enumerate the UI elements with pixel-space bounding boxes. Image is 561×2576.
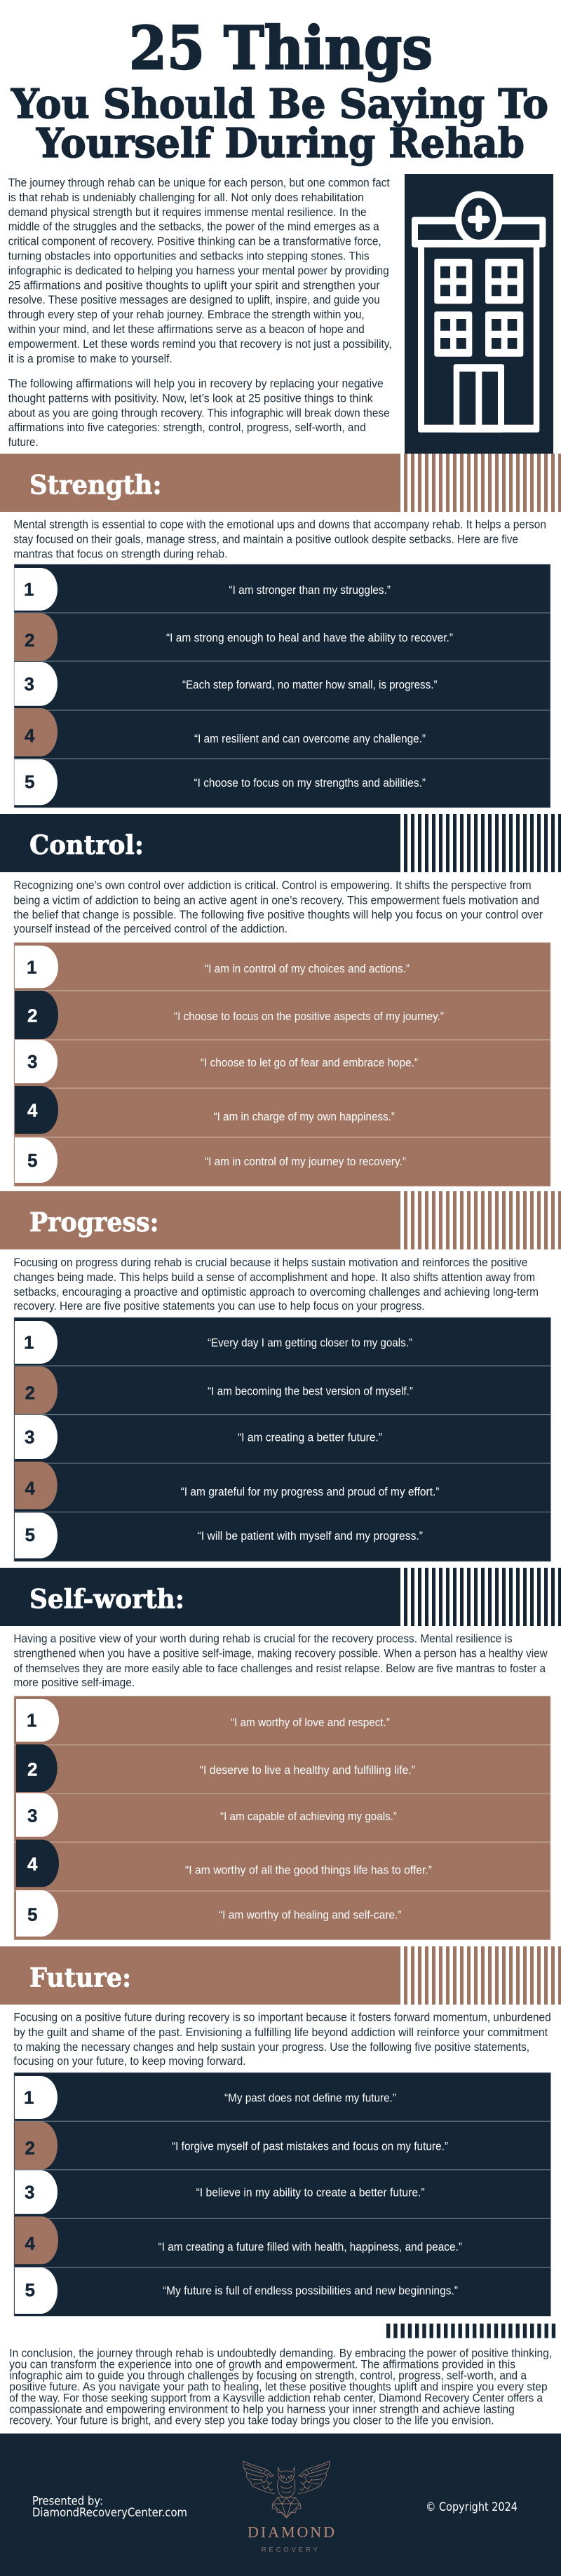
progress affirmation list: “Every day I am getting closer to my goals.”	[208, 1337, 412, 1350]
strength affirmation list: 5	[25, 771, 34, 792]
section header: progress	[0, 1191, 561, 1249]
strength description	[13, 518, 546, 561]
control description	[13, 879, 543, 935]
strength affirmation list: 4	[25, 725, 35, 746]
self-worth affirmation list: “I am capable of achieving my goals.”	[220, 1810, 397, 1823]
intro text block: The journey through rehab can be unique for each person, but one common fact	[8, 176, 390, 189]
conclusion text	[9, 2347, 552, 2427]
intro text block: it is a promise to make to yourself.	[8, 352, 173, 365]
progress affirmation list: 5	[25, 1524, 35, 1545]
self-worth affirmation list	[14, 1696, 550, 1940]
title	[11, 13, 548, 167]
progress affirmation list: 1	[24, 1332, 34, 1353]
intro text block: through every step of your rehab journey. Embrace the strength within you,	[8, 308, 365, 321]
self-worth description: more positive self-image.	[13, 1676, 135, 1689]
control affirmation list: 5	[27, 1150, 37, 1171]
control affirmation list: “I am in control of my journey to recovery.”	[205, 1155, 406, 1168]
self-worth affirmation list: “I am worthy of healing and self-care.”	[219, 1909, 401, 1922]
intro text block: is that rehab is undeniably challenging for all. Not only does rehabilitation	[8, 191, 364, 204]
control description: yourself instead of the perceived control of the addiction.	[13, 922, 288, 935]
future description: focusing on your future, to keep moving forward.	[13, 2054, 246, 2068]
control affirmation list: “I am in charge of my own happiness.”	[214, 1111, 395, 1123]
section header: self-worth: Self-worth:	[29, 1583, 184, 1614]
control affirmation list	[14, 942, 550, 1186]
self-worth affirmation list: “I deserve to live a healthy and fulfilling life.”	[200, 1764, 415, 1777]
conclusion text: recovery. Your future is bright, and every step you take today brings you closer to the life you envision.	[9, 2414, 494, 2427]
progress affirmation list: “I will be patient with myself and my progress.”	[198, 1530, 423, 1543]
intro text block: turning obstacles into opportunities and setbacks into stepping stones. This	[8, 250, 370, 262]
logo: diamond recovery owl: RECOVERY	[262, 2546, 318, 2554]
control affirmation list: “I choose to let go of fear and embrace hope.”	[201, 1057, 418, 1069]
section header: future	[0, 1946, 561, 2005]
title: You Should Be Saying To	[11, 81, 548, 128]
self-worth affirmation list: 3	[27, 1805, 37, 1826]
conclusion text: you can transform the experience into one of growth and empowerment. The affirmations provided in this	[9, 2358, 515, 2371]
self-worth description: Having a positive view of your worth during rehab is crucial for the recovery process. Mental resilience is	[13, 1632, 513, 1646]
logo: diamond recovery owl: DIAMOND	[248, 2523, 334, 2540]
section header: strength	[0, 454, 561, 512]
progress affirmation list: 4	[25, 1477, 35, 1498]
strength affirmation list: “I choose to focus on my strengths and abilities.”	[194, 777, 426, 789]
intro text block: future.	[8, 435, 39, 449]
intro text block	[8, 176, 392, 449]
self-worth affirmation list: 5	[27, 1904, 37, 1925]
future affirmation list: “My past does not define my future.”	[224, 2092, 396, 2105]
presented by: Presented by:	[32, 2495, 103, 2508]
strength affirmation list: 1	[24, 579, 34, 600]
logo: diamond recovery owl	[243, 2461, 334, 2554]
strength affirmation list: 3	[24, 674, 34, 695]
panel: progress	[0, 1191, 561, 1561]
future affirmation list: “I forgive myself of past mistakes and focus on my future.”	[172, 2141, 448, 2153]
future affirmation list: 3	[25, 2182, 34, 2203]
presented by: DiamondRecoveryCenter.com	[32, 2506, 187, 2519]
panel: strength	[0, 454, 561, 808]
future affirmation list: 1	[24, 2087, 34, 2108]
progress description	[13, 1256, 539, 1313]
intro text block: thought patterns with positivity. Now, let’s look at 25 positive things to think	[8, 392, 373, 405]
panel: future	[0, 1946, 561, 2316]
intro text block: empowerment. Let these words remind you that recovery is not just a possibility,	[8, 337, 392, 351]
icon: hospital building	[405, 174, 553, 454]
future description	[13, 2011, 551, 2068]
presented by	[32, 2495, 187, 2519]
conclusion text: compassionate and empowering environment to help you harness your inner strength and achieve lasting	[9, 2403, 515, 2416]
intro text block: affirmations into five categories: strength, control, progress, self-worth, and	[8, 421, 366, 434]
strength affirmation list	[14, 564, 550, 808]
title: 25 Things	[129, 13, 433, 83]
strength affirmation list: “I am stronger than my struggles.”	[229, 584, 391, 597]
section header: progress: Progress:	[29, 1207, 158, 1238]
panel: self-worth	[0, 1568, 561, 1940]
progress description: recovery. Here are five positive statements you can use to help focus on your progress.	[13, 1299, 425, 1313]
title: Yourself During Rehab	[36, 120, 525, 167]
future affirmation list: 2	[25, 2137, 35, 2158]
progress affirmation list: “I am becoming the best version of myself.”	[208, 1385, 413, 1398]
section header: control: Control:	[29, 829, 144, 860]
progress affirmation list: 3	[25, 1427, 34, 1448]
footer	[0, 2434, 561, 2576]
progress affirmation list: 2	[25, 1383, 35, 1404]
self-worth affirmation list: 4	[27, 1853, 38, 1874]
strength affirmation list: 2	[25, 630, 34, 651]
copyright: © Copyright 2024	[426, 2500, 518, 2514]
self-worth affirmation list: 1	[27, 1710, 36, 1731]
section header: future: Future:	[29, 1962, 131, 1993]
intro text block: 25 affirmations and positive thoughts to uplift your spirit and strengthen your	[8, 278, 380, 292]
future affirmation list: “My future is full of endless possibilities and new beginnings.”	[163, 2285, 458, 2298]
strength affirmation list: “I am resilient and can overcome any challenge.”	[194, 733, 426, 745]
progress affirmation list: “I am grateful for my progress and proud of my effort.”	[181, 1486, 439, 1498]
section header: control	[0, 814, 561, 872]
progress affirmation list	[14, 1317, 551, 1561]
section header: self-worth	[0, 1568, 561, 1626]
self-worth description	[13, 1632, 548, 1689]
progress affirmation list: “I am creating a better future.”	[238, 1432, 382, 1444]
future affirmation list	[14, 2073, 551, 2316]
intro text block: infographic is dedicated to helping you harness your mental power by providing	[8, 264, 389, 277]
future affirmation list: 5	[25, 2279, 35, 2300]
section header: strength: Strength:	[29, 469, 162, 500]
intro text block: demand physical strength but it requires immense mental resilience. In the	[8, 205, 367, 219]
self-worth affirmation list: “I am worthy of all the good things life has to offer.”	[185, 1864, 432, 1877]
future affirmation list: “I am creating a future filled with health, happiness, and peace.”	[158, 2241, 462, 2253]
control affirmation list: “I am in control of my choices and actions.”	[205, 963, 410, 975]
control affirmation list: 2	[27, 1005, 37, 1026]
panel: control	[0, 814, 561, 1186]
future affirmation list: “I believe in my ability to create a better future.”	[196, 2187, 425, 2199]
strength affirmation list: “I am strong enough to heal and have the ability to recover.”	[166, 632, 453, 644]
control affirmation list: 1	[27, 957, 36, 978]
self-worth affirmation list: “I am worthy of love and respect.”	[231, 1716, 390, 1729]
control affirmation list: 4	[27, 1099, 38, 1120]
strength description: mantras that focus on strength during rehab.	[13, 548, 227, 561]
intro text block: within your mind, and let these affirmations serve as a beacon of hope and	[8, 323, 365, 336]
intro text block: middle of the struggles and the setbacks, the power of the mind emerges as a	[8, 220, 379, 233]
intro text block: critical component of recovery. Positive thinking can be a transformative force,	[8, 235, 381, 248]
intro text block: resolve. These positive messages are designed to uplift, inspire, and guide you	[8, 293, 380, 306]
intro text block: about as you are going through recovery. This infographic will break down these	[8, 407, 390, 420]
strength description: stay focused on their goals, manage stress, and maintain a positive outlook despite setbacks. Here are five	[13, 533, 518, 546]
control affirmation list: 3	[27, 1051, 37, 1072]
intro text block: The following affirmations will help you in recovery by replacing your negative	[8, 377, 384, 391]
control affirmation list: “I choose to focus on the positive aspects of my journey.”	[174, 1010, 444, 1023]
self-worth affirmation list: 2	[27, 1759, 37, 1780]
future affirmation list: 4	[25, 2232, 35, 2253]
strength affirmation list: “Each step forward, no matter how small, is progress.”	[182, 679, 438, 691]
